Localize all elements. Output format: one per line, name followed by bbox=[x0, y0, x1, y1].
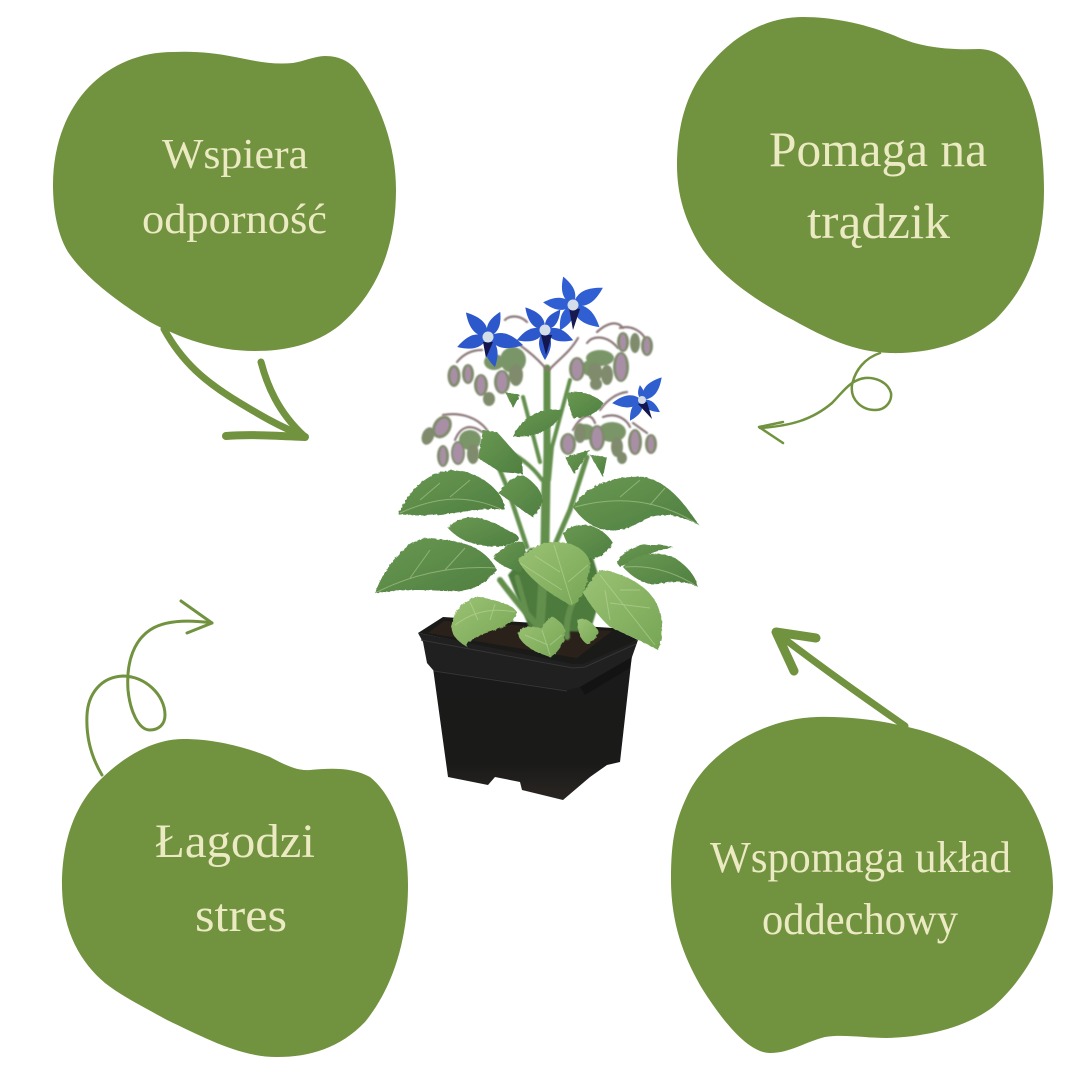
text: Łagodzi stres: stres bbox=[195, 889, 287, 942]
text: Wspomaga układ oddechowy bbox=[710, 833, 1011, 944]
pot bbox=[418, 617, 638, 800]
flower left bbox=[455, 308, 525, 368]
panel: Wspiera odporność bbox=[53, 52, 396, 351]
leaves: dark back bbox=[375, 392, 699, 593]
panel: Wspomaga układ oddechowy bbox=[671, 717, 1053, 1053]
buds bbox=[419, 332, 657, 467]
text: Wspiera odporność bbox=[142, 132, 327, 243]
stems bbox=[490, 368, 587, 637]
flower stalks bbox=[443, 316, 647, 440]
text: Pomaga na trądzik: Pomaga na bbox=[769, 121, 987, 177]
arrow: bottom right thick bbox=[776, 632, 905, 726]
dark foliage behind stems bbox=[508, 548, 603, 632]
flower back top bbox=[543, 275, 606, 333]
leaves: veins front bbox=[455, 545, 655, 655]
blob bottom left bbox=[62, 739, 408, 1057]
text: Pomaga na trądzik bbox=[769, 121, 987, 249]
flower right bbox=[612, 373, 666, 423]
flowers bbox=[455, 275, 666, 423]
illustration: borage plant in pot bbox=[375, 275, 699, 800]
panel: Łagodzi stres bbox=[62, 739, 408, 1057]
leaves: light front bbox=[452, 542, 662, 657]
flower middle bbox=[515, 303, 575, 360]
text: Wspiera odporność: Wspiera bbox=[162, 132, 308, 178]
blob bottom right bbox=[671, 717, 1053, 1053]
blob top left bbox=[53, 52, 396, 351]
blob top right bbox=[677, 17, 1044, 353]
text: Łagodzi stres: Łagodzi bbox=[155, 815, 315, 868]
arrow: top right thin loop bbox=[759, 353, 891, 443]
arrow: top left thick bbox=[164, 329, 305, 437]
text: Wspiera odporność: odporność bbox=[142, 197, 327, 243]
text: Wspomaga układ oddechowy: Wspomaga układ bbox=[710, 833, 1011, 882]
arrow: bottom left thin loop bbox=[87, 601, 212, 775]
leaves: veins back bbox=[375, 480, 699, 593]
text: Wspomaga układ oddechowy: oddechowy bbox=[762, 895, 958, 944]
text: Pomaga na trądzik: trądzik bbox=[807, 193, 950, 249]
panel: Pomaga na trądzik bbox=[677, 17, 1044, 353]
text: Łagodzi stres bbox=[155, 815, 315, 942]
